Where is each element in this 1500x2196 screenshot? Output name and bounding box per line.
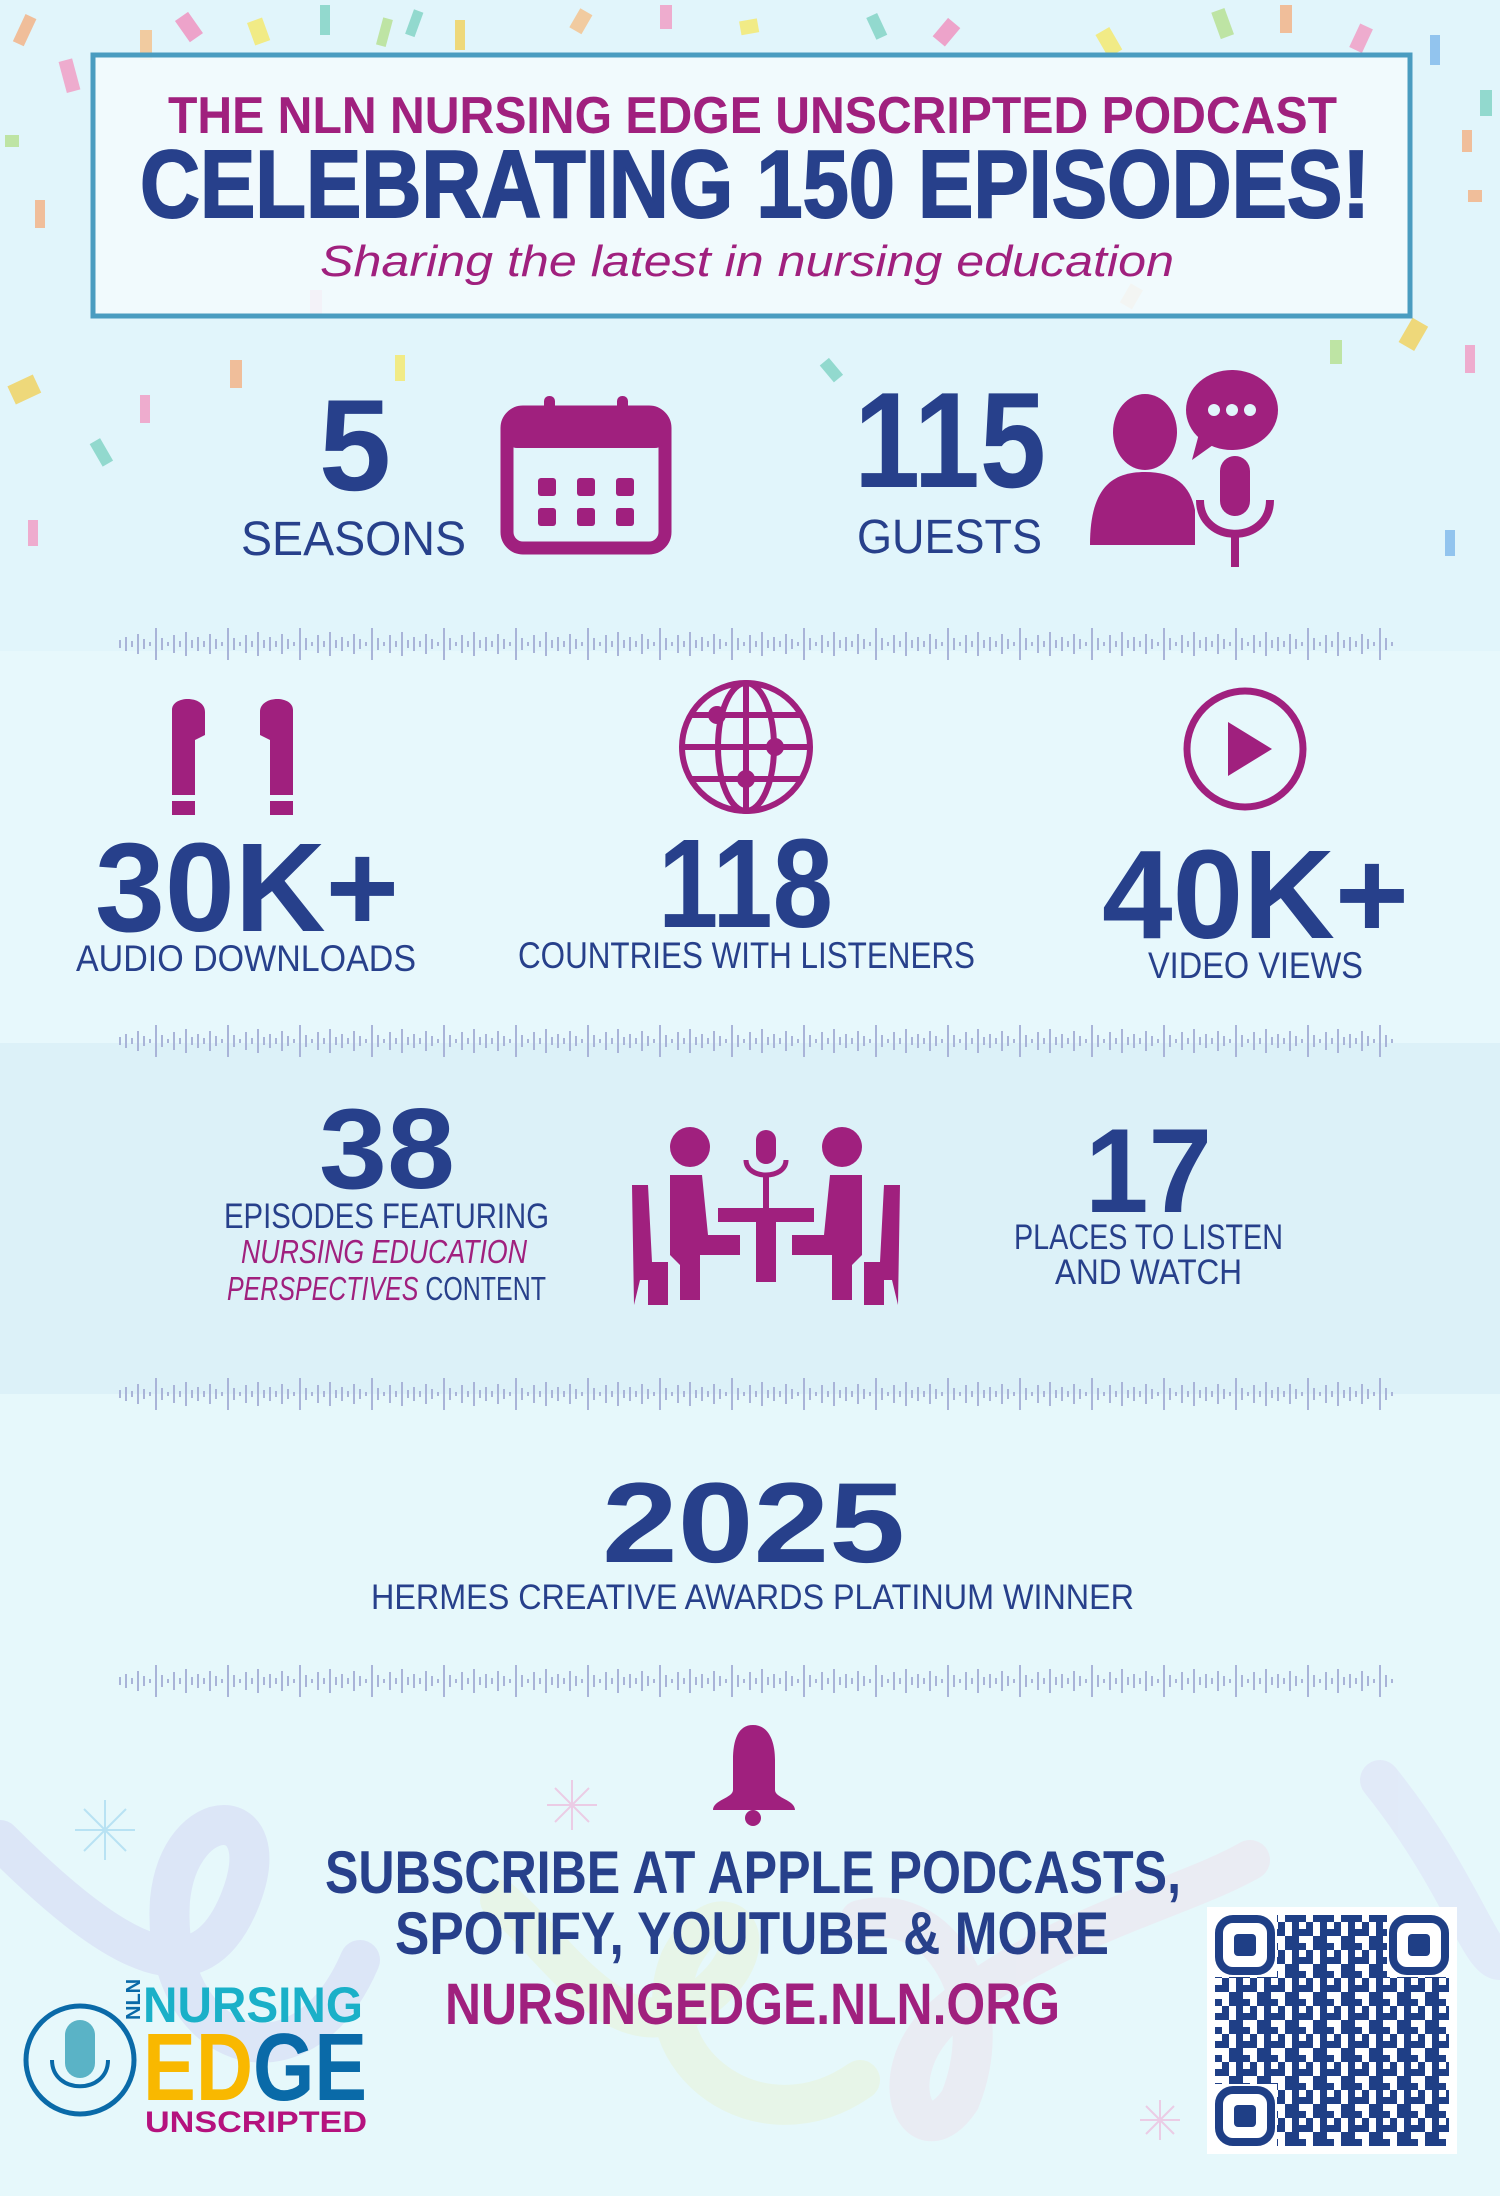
logo: Nursing Edge Unscripted: GE: [253, 2014, 367, 2121]
subscribe call to action: [325, 1839, 1181, 2037]
stat: 118 countries: [518, 813, 975, 976]
separator waves: [119, 624, 1396, 1701]
stat: 5 seasons: SEASONS: [241, 513, 466, 566]
stat: 38 episodes: [224, 1086, 549, 1307]
stat: 2025 award: 2025: [602, 1460, 905, 1587]
logo: Nursing Edge Unscripted: UNSCRIPTED: [145, 2106, 367, 2139]
stat: 30K+ audio downloads: 30K+: [95, 817, 399, 958]
stat: 118 countries: 118: [658, 813, 833, 954]
logo: Nursing Edge Unscripted: [26, 1977, 367, 2139]
subtitle: Sharing the latest in nursing education: [320, 237, 1174, 286]
title box: [93, 55, 1410, 316]
stat: 40K+ video views: VIDEO VIEWS: [1148, 945, 1363, 986]
icon: earbuds: [172, 699, 293, 815]
stat: 5 seasons: [241, 372, 466, 566]
icon: two people at table with mic: [632, 1127, 900, 1305]
logo: Nursing Edge Unscripted: ED: [143, 2014, 253, 2121]
sparkles: [75, 1780, 1180, 2140]
stat: 30K+ audio downloads: AUDIO DOWNLOADS: [76, 938, 416, 979]
confetti: [5, 5, 1492, 556]
stat: 38 episodes: PERSPECTIVES CONTENT: [227, 1270, 546, 1307]
title line 1: THE NLN NURSING EDGE UNSCRIPTED PODCAST: [168, 87, 1337, 145]
stat: 17 places: 17: [1085, 1104, 1212, 1238]
icon: play button: [1187, 691, 1303, 807]
stat: 5 seasons: 5: [319, 372, 391, 518]
icon: bell: [713, 1725, 795, 1826]
stat: 40K+ video views: 40K+: [1102, 824, 1409, 965]
stat: 115 guests: [854, 364, 1046, 564]
stat: 38 episodes: NURSING EDUCATION: [241, 1233, 527, 1270]
subscribe call to action: SPOTIFY, YOUTUBE & MORE: [395, 1900, 1109, 1967]
stat: 2025 award: [371, 1460, 1134, 1617]
stat: 115 guests: GUESTS: [857, 511, 1042, 564]
stat: 17 places: AND WATCH: [1055, 1253, 1242, 1292]
stat: 118 countries: COUNTRIES WITH LISTENERS: [518, 935, 975, 976]
QR code: [1207, 1907, 1457, 2154]
stat: 17 places: [1014, 1104, 1283, 1292]
stat: 115 guests: 115: [854, 364, 1046, 516]
subscribe call to action: SUBSCRIBE AT APPLE PODCASTS,: [325, 1839, 1181, 1906]
stat: 38 episodes: 38: [319, 1086, 455, 1213]
stat: 2025 award: HERMES CREATIVE AWARDS PLATINUM WINNER: [371, 1578, 1134, 1617]
stat: 38 episodes: EPISODES FEATURING: [224, 1197, 549, 1236]
logo: Nursing Edge Unscripted: NURSING: [143, 1977, 363, 2033]
icon: guests with mic: [1090, 370, 1278, 567]
website url: NURSINGEDGE.NLN.ORG: [445, 1972, 1060, 2037]
logo: Nursing Edge Unscripted: NLN: [123, 1979, 145, 2020]
icon: calendar: [507, 396, 665, 548]
stat: 17 places: PLACES TO LISTEN: [1014, 1218, 1283, 1257]
icon: globe: [682, 683, 810, 811]
